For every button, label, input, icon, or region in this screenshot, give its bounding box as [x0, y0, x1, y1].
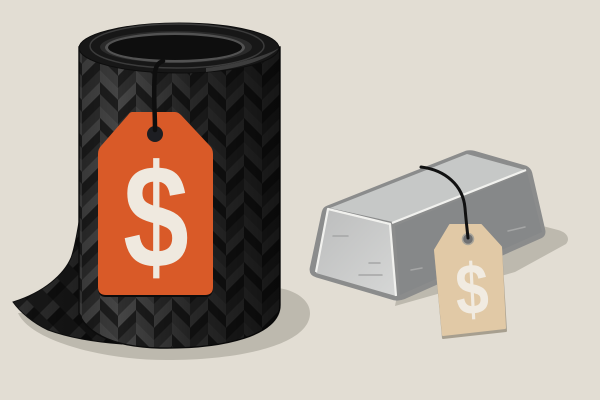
- tag shadow: [98, 160, 213, 297]
- roll opening: [108, 35, 242, 60]
- rim front highlight: [206, 48, 279, 72]
- surface scratches: [333, 227, 525, 275]
- end face: [316, 210, 396, 296]
- roll shadow: [18, 288, 310, 360]
- tag body: [98, 112, 213, 295]
- loose sheet flap: [13, 222, 150, 344]
- side face: [395, 172, 542, 295]
- tag eyelet: [147, 126, 163, 142]
- roll top rim: [79, 23, 279, 73]
- rim line: [90, 24, 264, 68]
- roll body: [79, 47, 280, 348]
- tag string: [421, 167, 468, 238]
- flap shading: [13, 222, 150, 344]
- roll body shading: [79, 47, 280, 348]
- orange price tag: [98, 61, 213, 299]
- beige price tag: [421, 167, 506, 338]
- silver bar shadow: [395, 224, 568, 306]
- bar outline: [311, 152, 544, 299]
- dollar sign: $: [453, 248, 490, 330]
- tag string: [154, 61, 163, 130]
- rim layer: [100, 31, 252, 63]
- top face: [330, 154, 525, 222]
- tag body shadow edge: [435, 225, 506, 338]
- tag body: [435, 225, 505, 335]
- bright edges: [316, 170, 526, 296]
- rim inner layer: [105, 32, 245, 62]
- carbon fibre roll: [13, 23, 280, 348]
- tag eyelet: [462, 234, 474, 244]
- silver bar: [311, 152, 544, 299]
- dollar sign: $: [123, 135, 189, 299]
